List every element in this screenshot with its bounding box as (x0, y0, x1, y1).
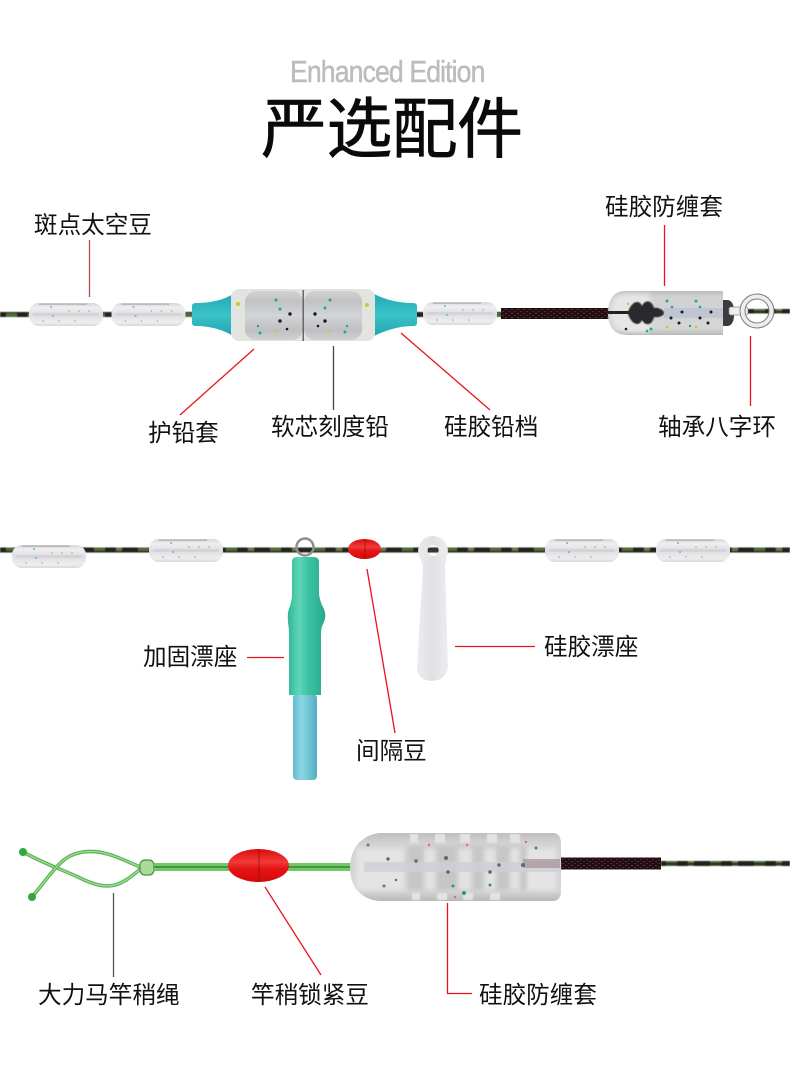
reinforced float seat (288, 557, 325, 780)
label: 硅胶防缠套 bottom: 硅胶防缠套 (479, 982, 597, 1009)
label: 斑点太空豆 (34, 212, 152, 297)
spacer bead red (348, 539, 381, 559)
label: 斑点太空豆: 斑点太空豆 (34, 212, 152, 239)
label: 硅胶防缠套 top: 硅胶防缠套 (605, 194, 723, 221)
line end (745, 309, 790, 314)
label: 大力马竿稍绳: 大力马竿稍绳 (38, 982, 180, 1009)
braided sleeve tube (501, 308, 609, 319)
label: 硅胶铅档: 硅胶铅档 (444, 414, 538, 441)
assembly: top rig (0, 289, 790, 341)
space bean 2 (112, 303, 186, 326)
subtitle: Enhanced Edition (290, 55, 485, 90)
steel ring (296, 538, 314, 556)
label: 轴承八字环: 轴承八字环 (658, 414, 776, 441)
label: 护铅套: 护铅套 (148, 420, 219, 447)
label: 软芯刻度铅: 软芯刻度铅 (271, 414, 389, 441)
rod tip rope loop (19, 848, 154, 901)
label: 间隔豆 (356, 569, 427, 765)
label: 护铅套 (148, 349, 254, 447)
title: 严选配件 (261, 92, 523, 166)
label: 硅胶漂座: 硅胶漂座 (544, 634, 638, 661)
label: 轴承八字环 (658, 336, 776, 441)
anti-tangle sleeve (608, 291, 723, 335)
label: 软芯刻度铅 (271, 346, 389, 441)
lead sleeve (231, 289, 375, 341)
assembly: bottom rig (19, 833, 790, 901)
silicone float seat (417, 536, 448, 681)
label: 竿稍锁紧豆 (251, 887, 369, 1009)
label: 加固漂座: 加固漂座 (143, 644, 237, 671)
silicone stopper left (192, 294, 233, 336)
bean 2 (149, 539, 223, 562)
anti-tangle sleeve large (350, 833, 561, 901)
fishing line (661, 861, 790, 866)
silicone stopper right (374, 294, 417, 336)
assembly: middle rig (0, 536, 790, 780)
label: 硅胶铅档 (401, 333, 538, 441)
label: 硅胶防缠套 top (605, 194, 723, 286)
fishing line (0, 312, 505, 317)
label: 硅胶防缠套 bottom (448, 903, 597, 1009)
bearing swivel ring (723, 296, 772, 326)
space bean 1 (29, 303, 103, 326)
rod tip lock bead (228, 849, 289, 882)
label: 间隔豆: 间隔豆 (356, 738, 427, 765)
space bean 3 (423, 302, 497, 325)
soft core lead (236, 290, 369, 341)
label: 竿稍锁紧豆: 竿稍锁紧豆 (251, 982, 369, 1009)
fishing line (0, 548, 790, 552)
braided tube (558, 858, 661, 870)
bean 4 (656, 539, 730, 562)
bean 1 (12, 545, 86, 568)
bean 3 (545, 539, 619, 562)
green rope (154, 863, 354, 871)
